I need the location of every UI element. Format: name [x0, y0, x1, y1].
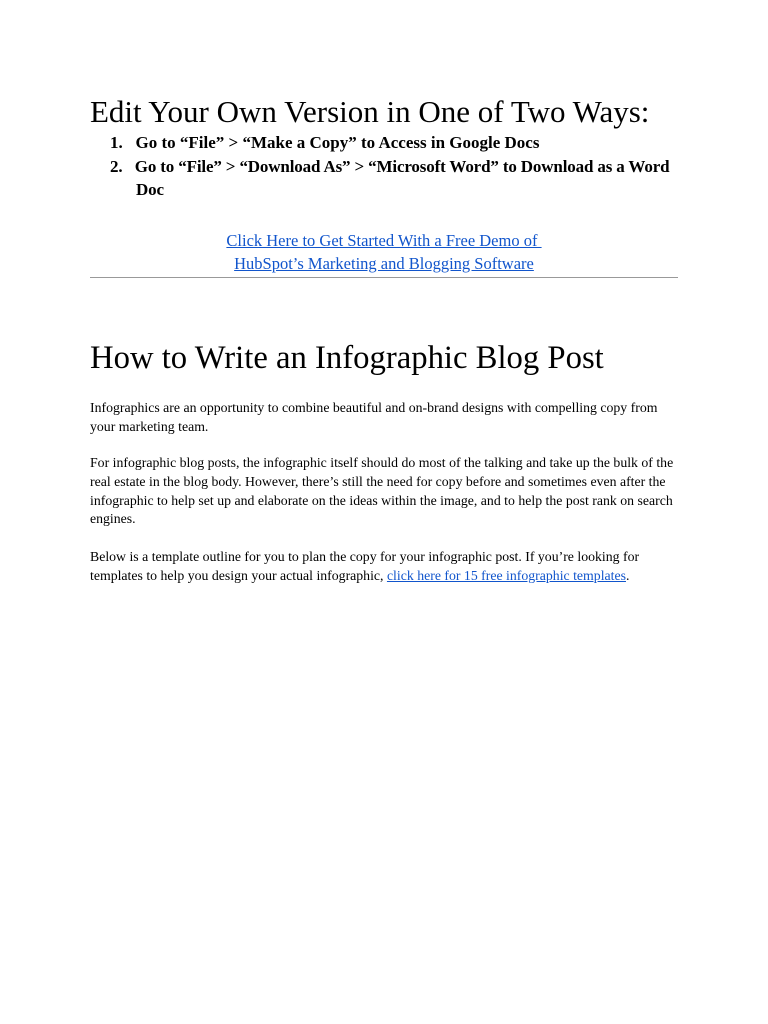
paragraph 1: Infographics are an opportunity to combine beautiful and on-brand designs with compelling copy from your marketing team.	[90, 400, 657, 434]
link: free demo: Click Here to Get Started With a Free Demo of	[226, 231, 537, 250]
list item 2: 2. Go to “File” > “Download As” > “Microsoft Word” to Download as a Word Doc	[110, 156, 669, 199]
link: free demo: HubSpot’s Marketing and Blogging Software	[234, 254, 534, 273]
paragraph 3: Below is a template outline for you to plan the copy for your infographic post. If you’re looking for templates to help you design your actual infographic, click here for 15 free infographic templates.	[90, 549, 639, 583]
heading: How to Write an Infographic Blog Post	[90, 340, 604, 376]
list: instructions	[110, 133, 670, 199]
link: free demo	[226, 231, 542, 273]
paragraph 2: For infographic blog posts, the infographic itself should do most of the talking and take up the bulk of the real estate in the blog body. However, there’s still the need for copy before and sometimes even after the infographic to help set up and elaborate on the ideas within the image, and to help the post rank on search engines.	[90, 455, 673, 526]
title: Edit Your Own Version in One of Two Ways:	[90, 94, 649, 129]
list item 1: 1. Go to “File” > “Make a Copy” to Access in Google Docs	[110, 133, 539, 152]
